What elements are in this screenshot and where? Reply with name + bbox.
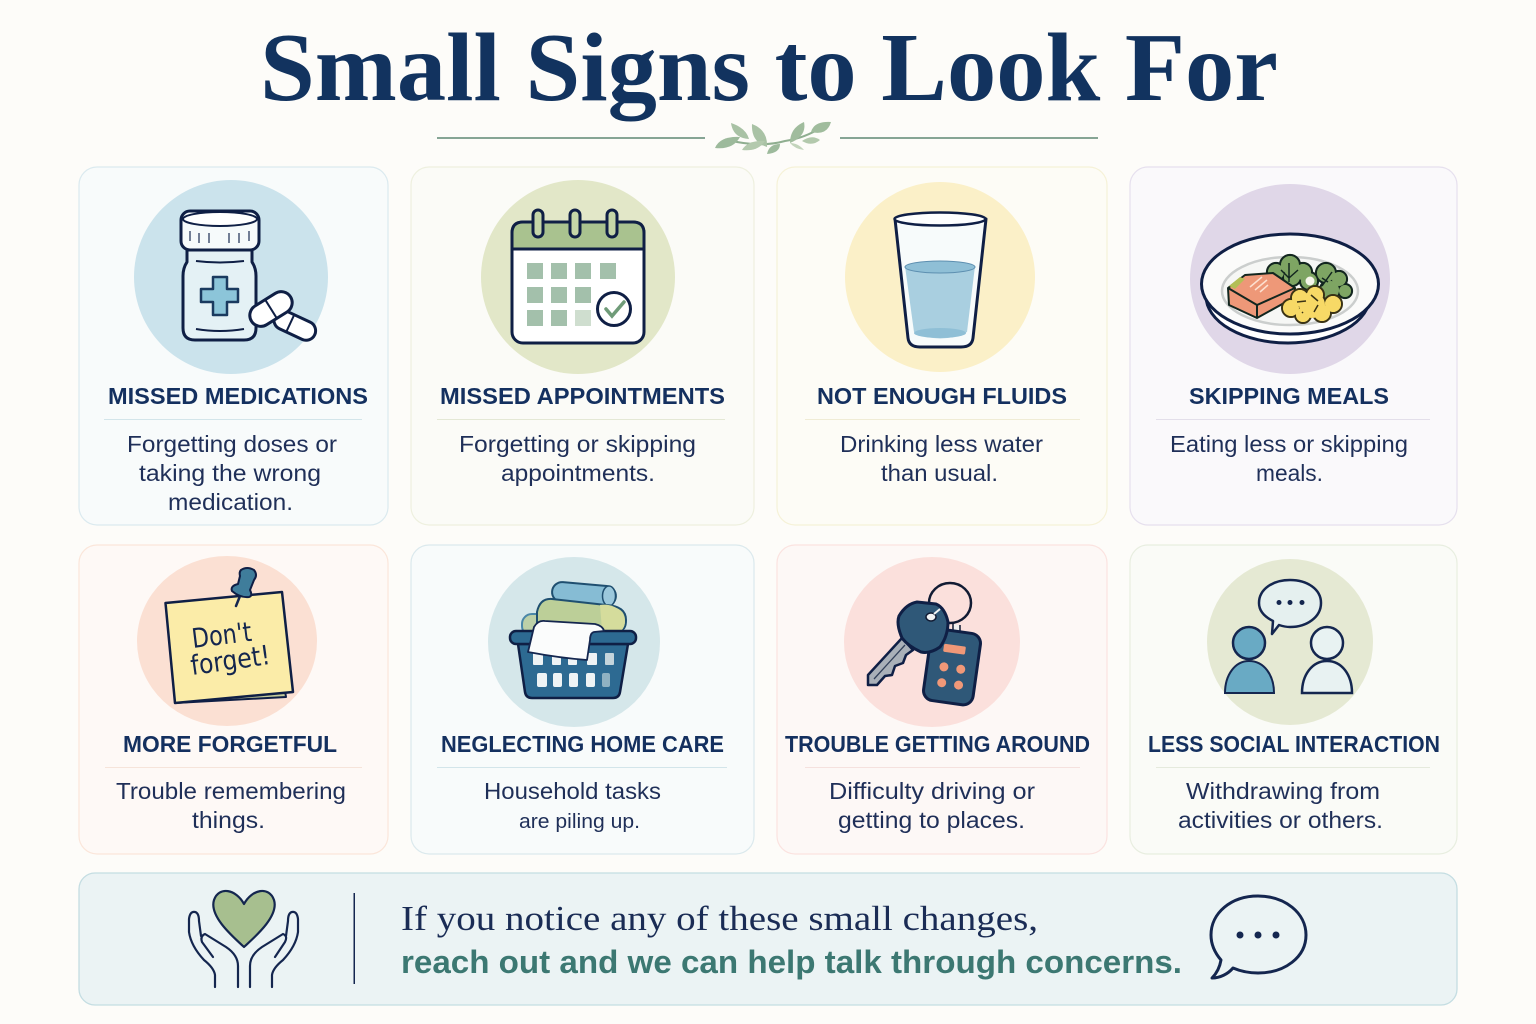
- icon: plate of food: [1202, 234, 1378, 343]
- icon: pill bottle: [181, 211, 319, 343]
- icon: two people talking: [1225, 580, 1352, 693]
- icon: glass of water: [894, 212, 986, 347]
- text: missed medications description: medication.: [168, 489, 293, 515]
- icon: sticky note with pin: Don't: [190, 617, 253, 655]
- heading: more forgetful: MORE FORGETFUL: [123, 731, 337, 757]
- text: callout message: [401, 899, 1182, 980]
- panel: more forgetful: [79, 545, 388, 854]
- panel: trouble getting around: [777, 545, 1107, 854]
- heading: less social interaction: LESS SOCIAL INTERACTION: [1148, 731, 1440, 757]
- icon: sticky note with pin: [166, 568, 293, 703]
- text: neglecting home care description: are piling up.: [519, 810, 640, 833]
- heading: trouble getting around: TROUBLE GETTING AROUND: [785, 731, 1090, 757]
- heading: not enough fluids: NOT ENOUGH FLUIDS: [817, 383, 1067, 409]
- heading: missed medications: MISSED MEDICATIONS: [108, 383, 368, 409]
- text: more forgetful description: Trouble remembering: [116, 778, 346, 804]
- heading: skipping meals: SKIPPING MEALS: [1189, 383, 1389, 409]
- text: missed appointments description: [459, 431, 696, 486]
- text: more forgetful description: things.: [192, 807, 265, 833]
- text: skipping meals description: Eating less or skipping: [1170, 431, 1408, 457]
- text: less social interaction description: activities or others.: [1178, 807, 1383, 833]
- icon: laundry basket: [510, 581, 636, 698]
- icon: car keys and fob: [868, 583, 982, 706]
- icon: speech bubble: [1211, 896, 1306, 978]
- heading: missed appointments: MISSED APPOINTMENTS: [440, 383, 725, 409]
- panel: neglecting home care: [411, 545, 754, 854]
- text: trouble getting around description: [829, 778, 1035, 833]
- decorative leaf divider: [437, 122, 1098, 154]
- text: missed appointments description: Forgetting or skipping: [459, 431, 696, 457]
- panel: skipping meals: [1130, 167, 1457, 525]
- title: Small Signs to Look For: [260, 14, 1278, 121]
- text: missed medications description: Forgetting doses or: [127, 431, 337, 457]
- text: callout message: If you notice any of these small changes,: [401, 899, 1038, 938]
- icon: sticky note with pin: forget!: [189, 640, 272, 682]
- text: callout message: reach out and we can help talk through concerns.: [401, 944, 1182, 980]
- callout banner: [79, 873, 1457, 1005]
- text: skipping meals description: meals.: [1256, 460, 1323, 486]
- text: missed appointments description: appointments.: [501, 460, 655, 486]
- panel: missed medications: [79, 167, 388, 525]
- panel: less social interaction: [1130, 545, 1457, 854]
- text: neglecting home care description: [484, 778, 661, 833]
- text: not enough fluids description: Drinking less water: [840, 431, 1043, 457]
- text: trouble getting around description: getting to places.: [838, 807, 1025, 833]
- text: less social interaction description: Withdrawing from: [1186, 778, 1380, 804]
- icon: calendar: [512, 210, 644, 343]
- text: missed medications description: taking the wrong: [139, 460, 321, 486]
- panel: not enough fluids: [777, 167, 1107, 525]
- heading: neglecting home care: NEGLECTING HOME CARE: [441, 731, 724, 757]
- text: trouble getting around description: Difficulty driving or: [829, 778, 1035, 804]
- text: less social interaction description: [1178, 778, 1383, 833]
- text: neglecting home care description: Household tasks: [484, 778, 661, 804]
- text: missed medications description: [127, 431, 337, 515]
- text: skipping meals description: [1170, 431, 1408, 486]
- text: more forgetful description: [116, 778, 346, 833]
- text: not enough fluids description: than usual.: [881, 460, 998, 486]
- panel: missed appointments: [411, 167, 754, 525]
- icon: hands holding heart: [189, 891, 298, 987]
- text: not enough fluids description: [840, 431, 1043, 486]
